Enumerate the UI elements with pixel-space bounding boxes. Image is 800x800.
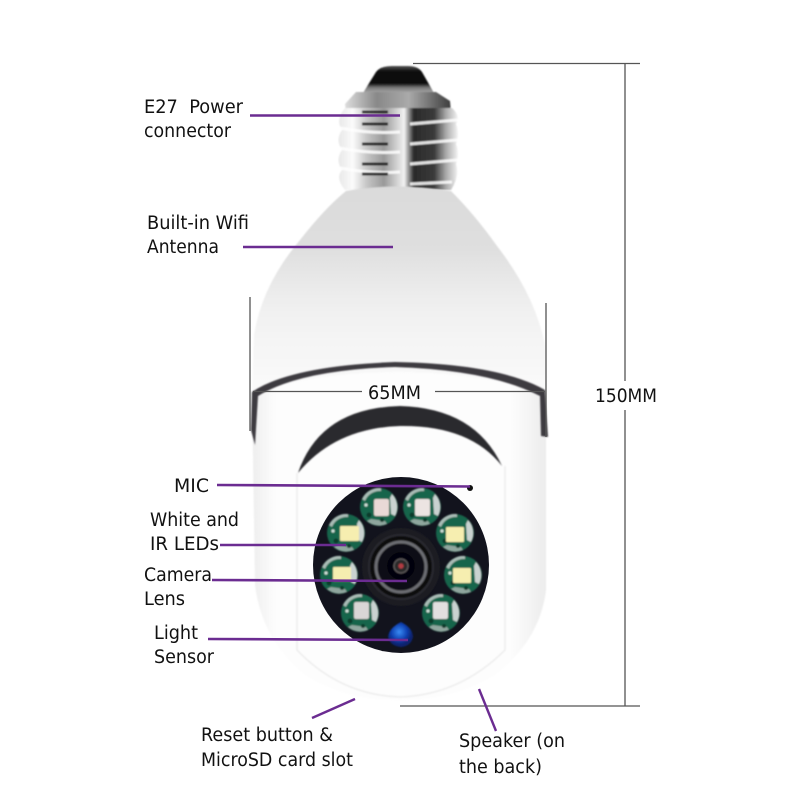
dimension: width 65MM [250, 297, 546, 437]
callout: reset button and MicroSD card slot [201, 699, 355, 771]
LED ring [320, 488, 482, 632]
callout: built-in wifi antenna: Antenna [147, 237, 219, 258]
white LED upper right [436, 514, 474, 552]
E27 metal screw base [338, 66, 458, 190]
upper white bulb housing [252, 186, 547, 395]
dark seam band [251, 362, 548, 445]
callout: E27 power connector [144, 97, 400, 142]
mic hole [467, 485, 473, 491]
dimension: height 150MM [400, 63, 657, 706]
callout: reset button and MicroSD card slot: MicroSD card slot [201, 750, 353, 771]
callout: E27 power connector: connector [144, 121, 231, 142]
callout: light sensor: Light [154, 623, 198, 644]
IR LED top right [403, 488, 441, 526]
IR LED top left [360, 488, 398, 526]
callout: white and IR LEDs: IR LEDs [150, 534, 219, 555]
camera head recess outline [297, 466, 505, 697]
callout: E27 power connector: E27 Power [144, 97, 243, 118]
white LED lower left [320, 556, 358, 594]
width label: 65MM [368, 383, 421, 404]
callout: light sensor: Sensor [154, 647, 214, 668]
height label: 150MM [595, 386, 657, 407]
IR LED bottom left [341, 594, 379, 632]
camera head dark crescent [298, 406, 502, 473]
callout: speaker on the back: the back) [459, 757, 542, 778]
white LED lower right [444, 556, 482, 594]
callout: camera lens: Lens [144, 589, 185, 610]
bulb camera product [251, 66, 548, 700]
callout: light sensor [154, 623, 408, 668]
callout: speaker on the back [459, 689, 565, 778]
callout: camera lens [144, 565, 407, 610]
callout: white and IR LEDs: White and [150, 510, 239, 531]
callout: white and IR LEDs [150, 510, 346, 555]
callout: MIC: MIC [174, 476, 209, 497]
callout: speaker on the back: Speaker (on [459, 731, 565, 752]
IR LED bottom right [422, 594, 460, 632]
lower camera housing [252, 372, 546, 700]
lens faceplate [313, 477, 489, 653]
callout: built-in wifi antenna [147, 213, 393, 258]
callout: reset button and MicroSD card slot: Reset button & [201, 725, 333, 746]
camera lens [362, 528, 440, 606]
light sensor [388, 622, 413, 647]
white LED upper left [327, 514, 365, 552]
callout: camera lens: Camera [144, 565, 212, 586]
callout: built-in wifi antenna: Built-in Wifi [147, 213, 249, 234]
